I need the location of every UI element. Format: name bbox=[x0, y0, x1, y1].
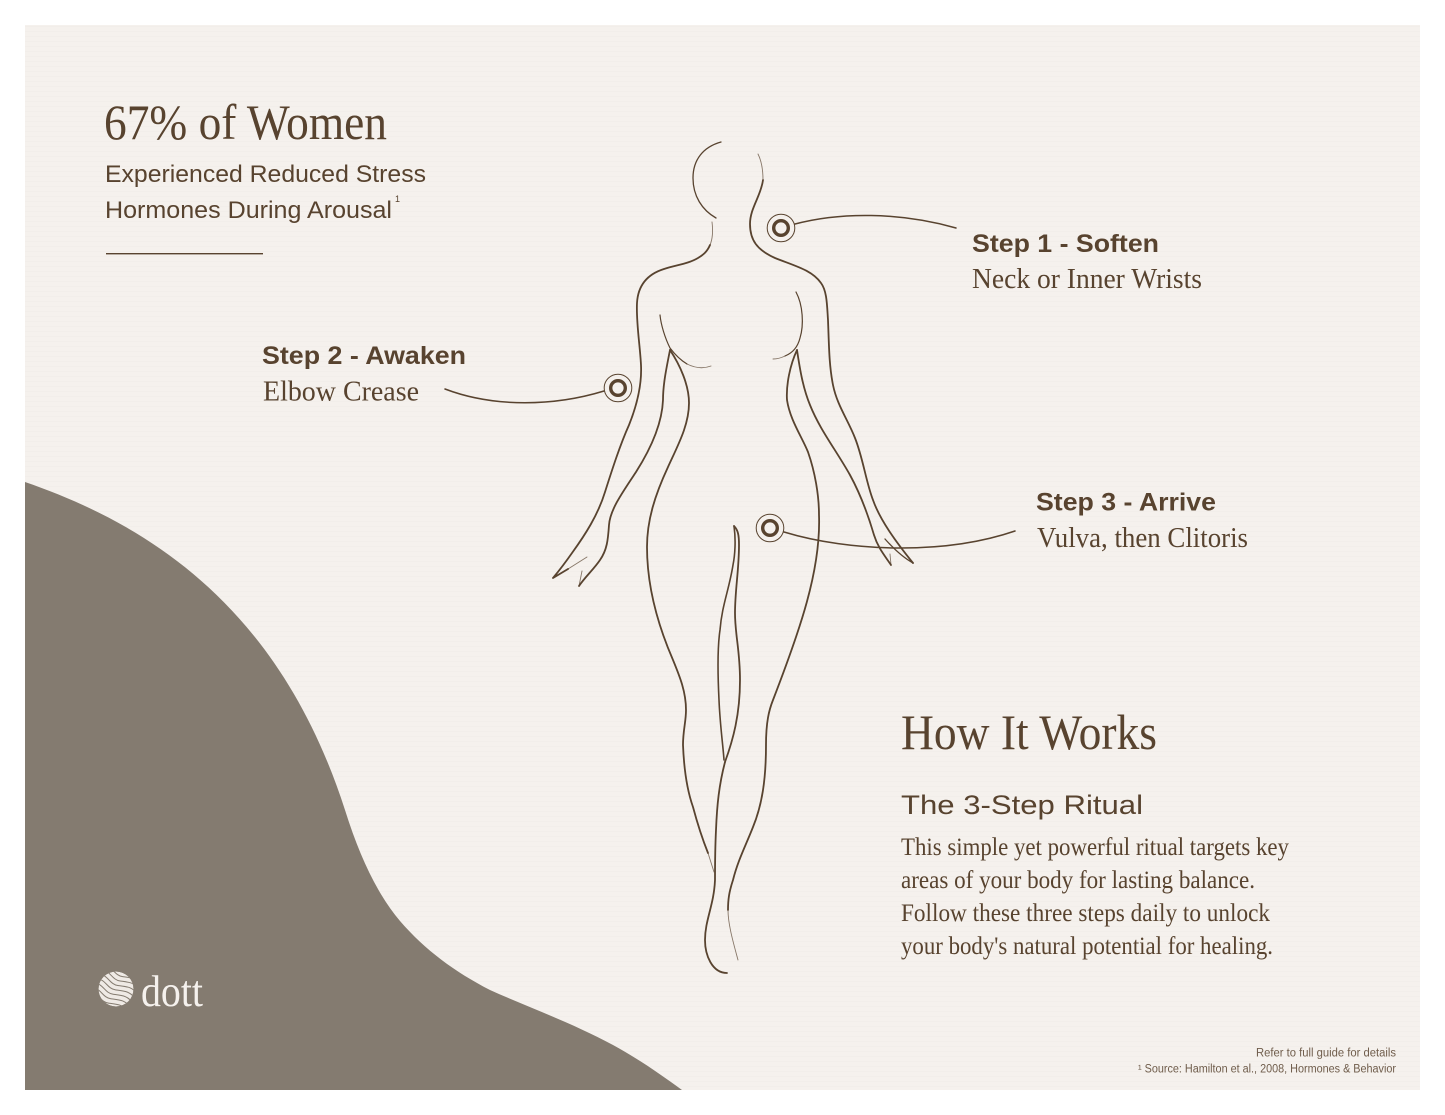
left arm inner and hand bbox=[579, 350, 670, 586]
right breast fading stroke bbox=[773, 356, 785, 359]
left shoulder and left arm outer bbox=[553, 245, 710, 578]
right thumb bbox=[890, 554, 891, 565]
footnotes: ¹ Source: Hamilton et al., 2008, Hormones & Behavior bbox=[1138, 1064, 1396, 1076]
left leg fading stroke bbox=[708, 853, 714, 872]
body text block: Follow these three steps daily to unlock bbox=[901, 900, 1270, 927]
body text block: your body's natural potential for healing. bbox=[901, 933, 1273, 960]
neck top fading stroke bbox=[758, 154, 763, 180]
neck and right shoulder, right arm outer bbox=[750, 180, 913, 563]
label: step 2 bbox=[262, 342, 466, 408]
heading: How It Works: How It Works bbox=[901, 704, 1157, 760]
front leg bbox=[705, 762, 727, 973]
right ankle fading stroke bbox=[728, 910, 738, 960]
right breast line bbox=[785, 292, 802, 356]
logo: dott bbox=[98, 972, 203, 1006]
inner thigh left edge bbox=[718, 526, 735, 760]
marker: step 1 with leader line bbox=[767, 214, 956, 242]
left hand fading stroke bbox=[568, 557, 587, 569]
inner thigh bbox=[725, 526, 740, 762]
label: step 1 bbox=[972, 230, 1202, 295]
statistic description: Hormones During Arousal bbox=[105, 197, 392, 224]
body text block: This simple yet powerful ritual targets key bbox=[901, 834, 1289, 861]
footnotes: Refer to full guide for details bbox=[1256, 1048, 1396, 1060]
statistic description: Experienced Reduced Stress bbox=[105, 161, 426, 188]
label: step 3: Vulva, then Clitoris bbox=[1037, 523, 1248, 554]
statistic description bbox=[105, 161, 426, 224]
label: step 3: Step 3 - Arrive bbox=[1036, 488, 1216, 516]
right finger bbox=[885, 539, 913, 563]
statistic description: 1 bbox=[395, 194, 400, 204]
label: step 3 bbox=[1036, 488, 1248, 554]
head outline bbox=[693, 142, 721, 218]
subheading: The 3-Step Ritual: The 3-Step Ritual bbox=[901, 790, 1143, 820]
left neck fading stroke bbox=[710, 222, 713, 245]
heading: 67% of Women: 67% of Women bbox=[104, 94, 387, 150]
torso and left hip and leg bbox=[647, 350, 708, 853]
torso right side, right leg bbox=[728, 350, 819, 910]
label: step 2: Step 2 - Awaken bbox=[262, 342, 466, 370]
label: step 1: Step 1 - Soften bbox=[972, 230, 1159, 258]
footnotes bbox=[1138, 1048, 1396, 1076]
wordmark: dott bbox=[141, 967, 203, 1016]
body line illustration bbox=[553, 142, 913, 973]
label: step 2: Elbow Crease bbox=[263, 376, 419, 408]
left breast line bbox=[660, 315, 687, 364]
divider rule bbox=[106, 253, 263, 254]
body text block bbox=[901, 834, 1289, 960]
right arm inner and hand bbox=[797, 350, 891, 565]
left thumb bbox=[579, 571, 582, 586]
label: step 1: Neck or Inner Wrists bbox=[972, 264, 1202, 295]
icon: wave globe bbox=[98, 972, 134, 1006]
marker: step 3 with leader line bbox=[756, 514, 1015, 548]
left breast fading stroke bbox=[687, 364, 711, 368]
body text block: areas of your body for lasting balance. bbox=[901, 867, 1255, 894]
marker: step 2 with leader line bbox=[445, 374, 632, 403]
taupe wave shape bbox=[25, 482, 682, 1090]
